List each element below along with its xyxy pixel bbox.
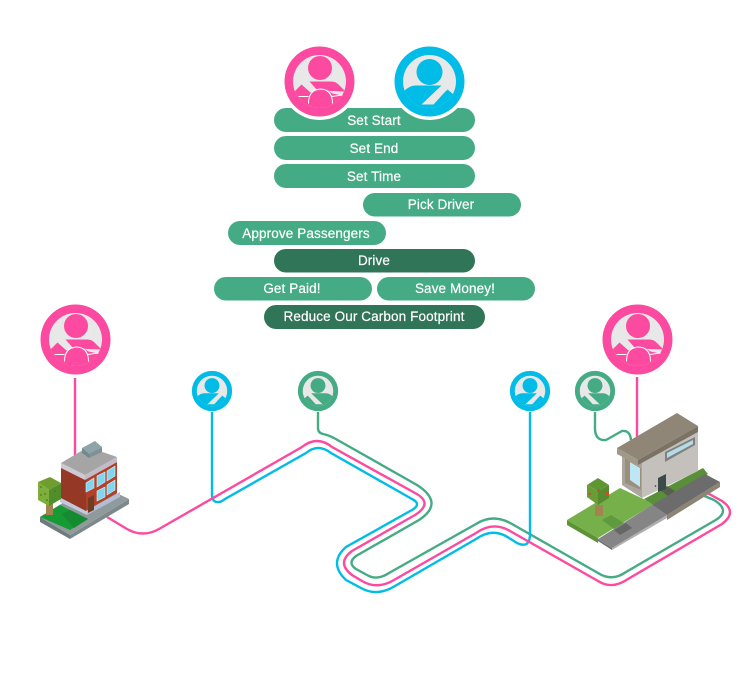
pill: Approve Passengers: Approve Passengers xyxy=(242,226,370,241)
connector: left pink driver to office xyxy=(74,378,76,456)
pill: Drive: Drive xyxy=(358,253,390,268)
pill: Pick Driver xyxy=(363,193,521,216)
pill: Set Time xyxy=(274,164,475,188)
connector: right green passenger to house xyxy=(595,412,631,440)
pill: Get Paid xyxy=(214,277,372,300)
pill: Set End: Set End xyxy=(350,141,398,156)
icon: green passenger avatar one xyxy=(298,371,338,411)
pill: Save Money: Save Money! xyxy=(415,281,495,296)
icon: top passenger avatar xyxy=(391,43,468,120)
icon: top driver avatar xyxy=(281,43,358,120)
route: blue line xyxy=(212,412,530,592)
icon: left driver avatar xyxy=(40,304,110,374)
pill: Pick Driver: Pick Driver xyxy=(408,197,475,212)
pill: Set Start xyxy=(274,108,475,132)
pill: Set Time: Set Time xyxy=(347,169,401,184)
illustration: office building xyxy=(38,441,129,539)
icon: green passenger avatar two xyxy=(575,371,615,411)
pill: Set End xyxy=(274,136,475,160)
connector: right pink driver to house xyxy=(636,377,638,440)
pill: Approve Passengers xyxy=(228,221,386,245)
pill: Reduce Our Carbon Footprint xyxy=(264,305,485,329)
route: green line xyxy=(318,412,723,578)
pill: Get Paid: Get Paid! xyxy=(263,281,321,296)
pill: Reduce Our Carbon Footprint: Reduce Our Carbon Footprint xyxy=(283,309,465,324)
pill: Set Start: Set Start xyxy=(347,113,401,128)
illustration: modern house xyxy=(567,413,720,550)
pill: Drive xyxy=(274,249,475,272)
icon: blue passenger avatar two xyxy=(510,371,550,411)
pill: Save Money xyxy=(377,277,535,300)
icon: right driver avatar xyxy=(602,304,672,374)
icon: blue passenger avatar one xyxy=(192,371,232,411)
route: pink line xyxy=(107,441,730,585)
